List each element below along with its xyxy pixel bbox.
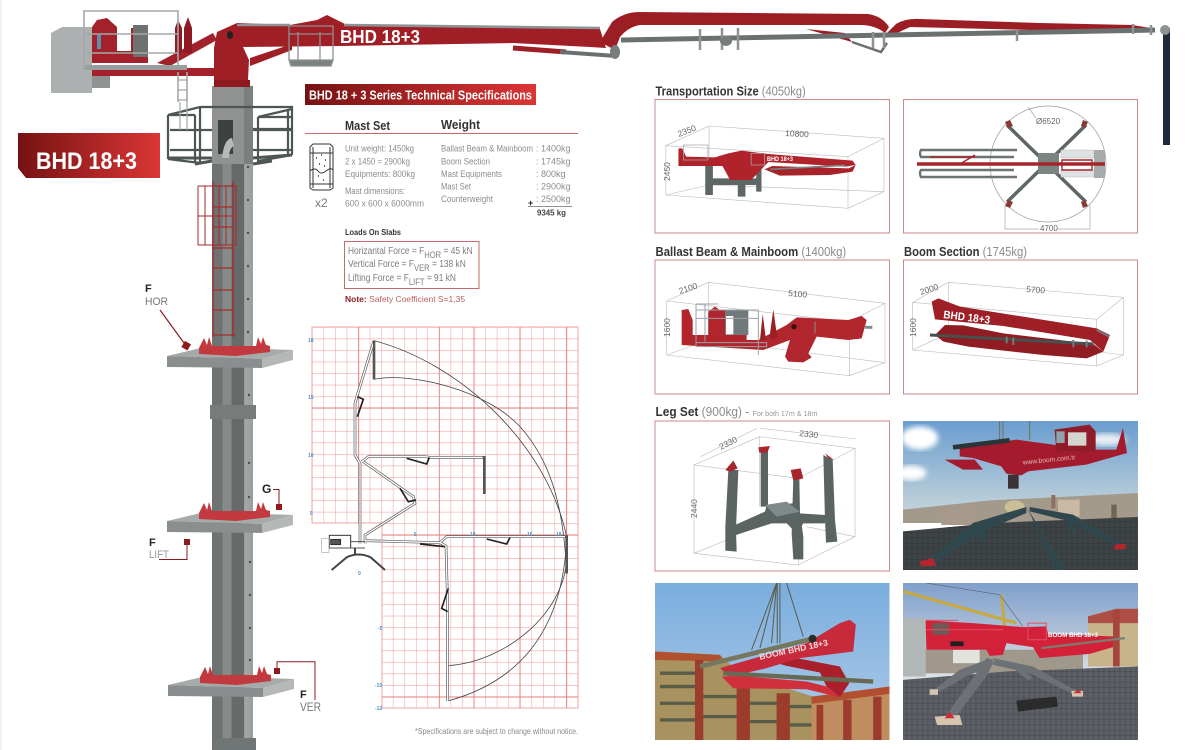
loads on slabs: Lifting Force = F bbox=[348, 272, 409, 284]
axis labels: 15 bbox=[308, 395, 314, 401]
panel: transportation top view: 4700 bbox=[1040, 224, 1058, 233]
panel: ballast beam and mainboom: 5100 bbox=[788, 288, 808, 300]
force label: F VER: F bbox=[300, 689, 307, 701]
panel: boom section: 1600 bbox=[908, 318, 918, 337]
icon: mast section bbox=[310, 144, 333, 190]
ballast frame bbox=[92, 18, 148, 63]
illustration: mast with slabs bbox=[167, 86, 294, 750]
chart grid bbox=[312, 327, 578, 708]
boom poses bbox=[355, 341, 567, 701]
weight table: : 2900kg bbox=[536, 182, 571, 192]
axis labels: 18 bbox=[308, 338, 314, 344]
photo: machine lifted above legs: www.boom.com.tr bbox=[1021, 454, 1077, 467]
panel: transportation side view: 2350 bbox=[676, 123, 698, 139]
title: transportation size: Transportation Size (4050kg) bbox=[656, 84, 806, 99]
panel: ballast beam and mainboom bbox=[655, 260, 890, 394]
slab 1 bbox=[167, 337, 293, 368]
illustration: ladder and cage bbox=[198, 181, 236, 337]
loads on slabs: HOR bbox=[424, 249, 441, 260]
panel: transportation side view: 2450 bbox=[662, 162, 672, 181]
loads on slabs: = 91 kN bbox=[424, 272, 456, 284]
weight table: Mast Equipments bbox=[441, 169, 502, 179]
loads on slabs: Loads On Slabs bbox=[345, 227, 401, 237]
slab 3 bbox=[168, 666, 294, 697]
weight table: Counterweight bbox=[441, 194, 493, 204]
table headings: Weight bbox=[441, 117, 481, 132]
boom platform bbox=[289, 26, 333, 66]
delivery pipe bbox=[621, 30, 1155, 40]
panel: transportation side view: 10800 bbox=[785, 128, 809, 139]
weight table: : 1400kg bbox=[536, 144, 571, 154]
weight table: Boom Section bbox=[441, 156, 490, 166]
loads on slabs: Vertical Force = F bbox=[348, 258, 414, 270]
mast set details: 600 x 600 x 6000mm bbox=[345, 198, 424, 208]
weight table: 9345 kg bbox=[537, 208, 566, 218]
weight table: : 2500kg bbox=[536, 194, 571, 204]
mast set details: Unit weight: 1450kg bbox=[345, 144, 414, 154]
panel: boom section: 2000 bbox=[919, 281, 940, 297]
axis labels: 5 bbox=[310, 511, 313, 517]
weight table: Mast Set bbox=[441, 182, 471, 192]
force label: F VER bbox=[274, 662, 321, 714]
table headings bbox=[305, 117, 578, 134]
mast set details: Equipments: 800kg bbox=[345, 169, 415, 179]
title: leg set: Leg Set (900kg) - For both 17m & 18m bbox=[656, 405, 817, 419]
loads on slabs: = 138 kN bbox=[430, 258, 466, 270]
end hose bbox=[1163, 28, 1170, 145]
heading: technical specifications: BHD 18 + 3 Series Technical Specifications bbox=[309, 88, 532, 102]
force label: F LIFT: F bbox=[149, 537, 156, 549]
loads on slabs: = 45 kN bbox=[441, 245, 473, 257]
axis labels: 18 bbox=[556, 532, 562, 538]
panel: ballast beam and mainboom: 1600 bbox=[662, 318, 672, 337]
mast set details: 2 x 1450 = 2900kg bbox=[345, 156, 410, 166]
loads on slabs bbox=[344, 227, 479, 304]
panel: leg set: 2330 bbox=[799, 428, 819, 440]
chart: working range bbox=[308, 327, 578, 712]
photo: boom section lifted bbox=[655, 583, 890, 740]
turret head bbox=[214, 15, 606, 80]
panel: leg set: 2440 bbox=[689, 499, 699, 518]
weight table bbox=[441, 144, 572, 218]
footnote: *Specifications are subject to change without notice. bbox=[415, 727, 578, 736]
panel: boom section bbox=[904, 260, 1138, 394]
weight table: + bbox=[528, 198, 533, 208]
photo: machine installed on site: BOOM BHD 18+3 bbox=[1048, 632, 1098, 639]
axis labels: -10 bbox=[375, 683, 382, 689]
ballast beam bbox=[92, 68, 214, 76]
axis labels: 10 bbox=[470, 532, 476, 538]
force label: F HOR: F bbox=[145, 283, 152, 295]
photo: boom section lifted: BOOM BHD 18+3 bbox=[758, 637, 829, 662]
second boom bbox=[600, 12, 889, 50]
loads on slabs: LIFT bbox=[409, 276, 425, 287]
panel: leg set: 2330 bbox=[717, 434, 739, 452]
reach curves bbox=[322, 341, 567, 701]
panel: boom section: 5700 bbox=[1026, 284, 1046, 295]
third boom bbox=[887, 19, 1151, 34]
mast set details bbox=[345, 144, 424, 208]
axis labels: 15 bbox=[527, 532, 533, 538]
mast column bbox=[212, 86, 253, 750]
axis labels bbox=[308, 338, 562, 712]
title: ballast beam and mainboom: Ballast Beam & Mainboom (1400kg) bbox=[656, 244, 846, 259]
badge: BHD 18+3 bbox=[18, 133, 160, 178]
axis labels: 5 bbox=[414, 532, 417, 538]
machine bbox=[329, 535, 351, 548]
illustration: mast platform bbox=[168, 0, 292, 164]
force label: G bbox=[262, 482, 282, 510]
loads on slabs: Note: Safety Coefficient S=1,35 bbox=[345, 294, 465, 304]
photo: machine installed on site bbox=[903, 583, 1138, 740]
lower cylinder bbox=[513, 48, 566, 52]
weight table: : 1745kg bbox=[536, 156, 571, 166]
title: boom section: Boom Section (1745kg) bbox=[904, 244, 1027, 259]
force label: F LIFT bbox=[149, 537, 190, 561]
loads on slabs: VER bbox=[414, 262, 430, 273]
brace bbox=[806, 29, 852, 42]
panel: transportation side view bbox=[655, 100, 890, 233]
panel: transportation side view: BHD 18+3 bbox=[767, 157, 794, 163]
panel: ballast beam and mainboom: 2100 bbox=[678, 280, 699, 296]
panel: leg set bbox=[655, 421, 890, 571]
counterweight bbox=[51, 27, 92, 93]
loads on slabs: Horizantal Force = F bbox=[348, 245, 424, 257]
force label: F VER: VER bbox=[300, 702, 321, 714]
mast door opening bbox=[218, 120, 233, 154]
force label: F HOR: HOR bbox=[145, 296, 168, 308]
illustration: boom arm bbox=[51, 11, 1170, 145]
photo: machine lifted above legs bbox=[903, 421, 1138, 570]
badge: BHD 18+3: BHD 18+3 bbox=[36, 148, 137, 175]
force label: G: G bbox=[262, 482, 271, 496]
multiplier: x2 bbox=[315, 196, 328, 210]
axis labels: 10 bbox=[308, 453, 314, 459]
panel: transportation top view bbox=[904, 100, 1138, 233]
panel: boom section: BHD 18+3 bbox=[943, 309, 991, 327]
weight table: Ballast Beam & Mainboom bbox=[441, 144, 533, 154]
mast set details: Mast dimensions: bbox=[345, 186, 405, 196]
axis labels: -5 bbox=[378, 626, 383, 632]
force label: F LIFT: LIFT bbox=[149, 549, 169, 561]
heading: technical specifications bbox=[305, 84, 536, 105]
force label: F HOR bbox=[145, 283, 191, 350]
axis labels: -12 bbox=[375, 706, 382, 712]
weight table: : 800kg bbox=[536, 169, 566, 179]
rail bbox=[84, 11, 187, 102]
axis labels: 0 bbox=[358, 571, 361, 577]
panel: transportation top view: Ø6520 bbox=[1036, 117, 1061, 126]
table headings: Mast Set bbox=[345, 118, 391, 133]
slab 2 bbox=[167, 502, 293, 533]
boom label: BHD 18+3 bbox=[340, 27, 420, 47]
